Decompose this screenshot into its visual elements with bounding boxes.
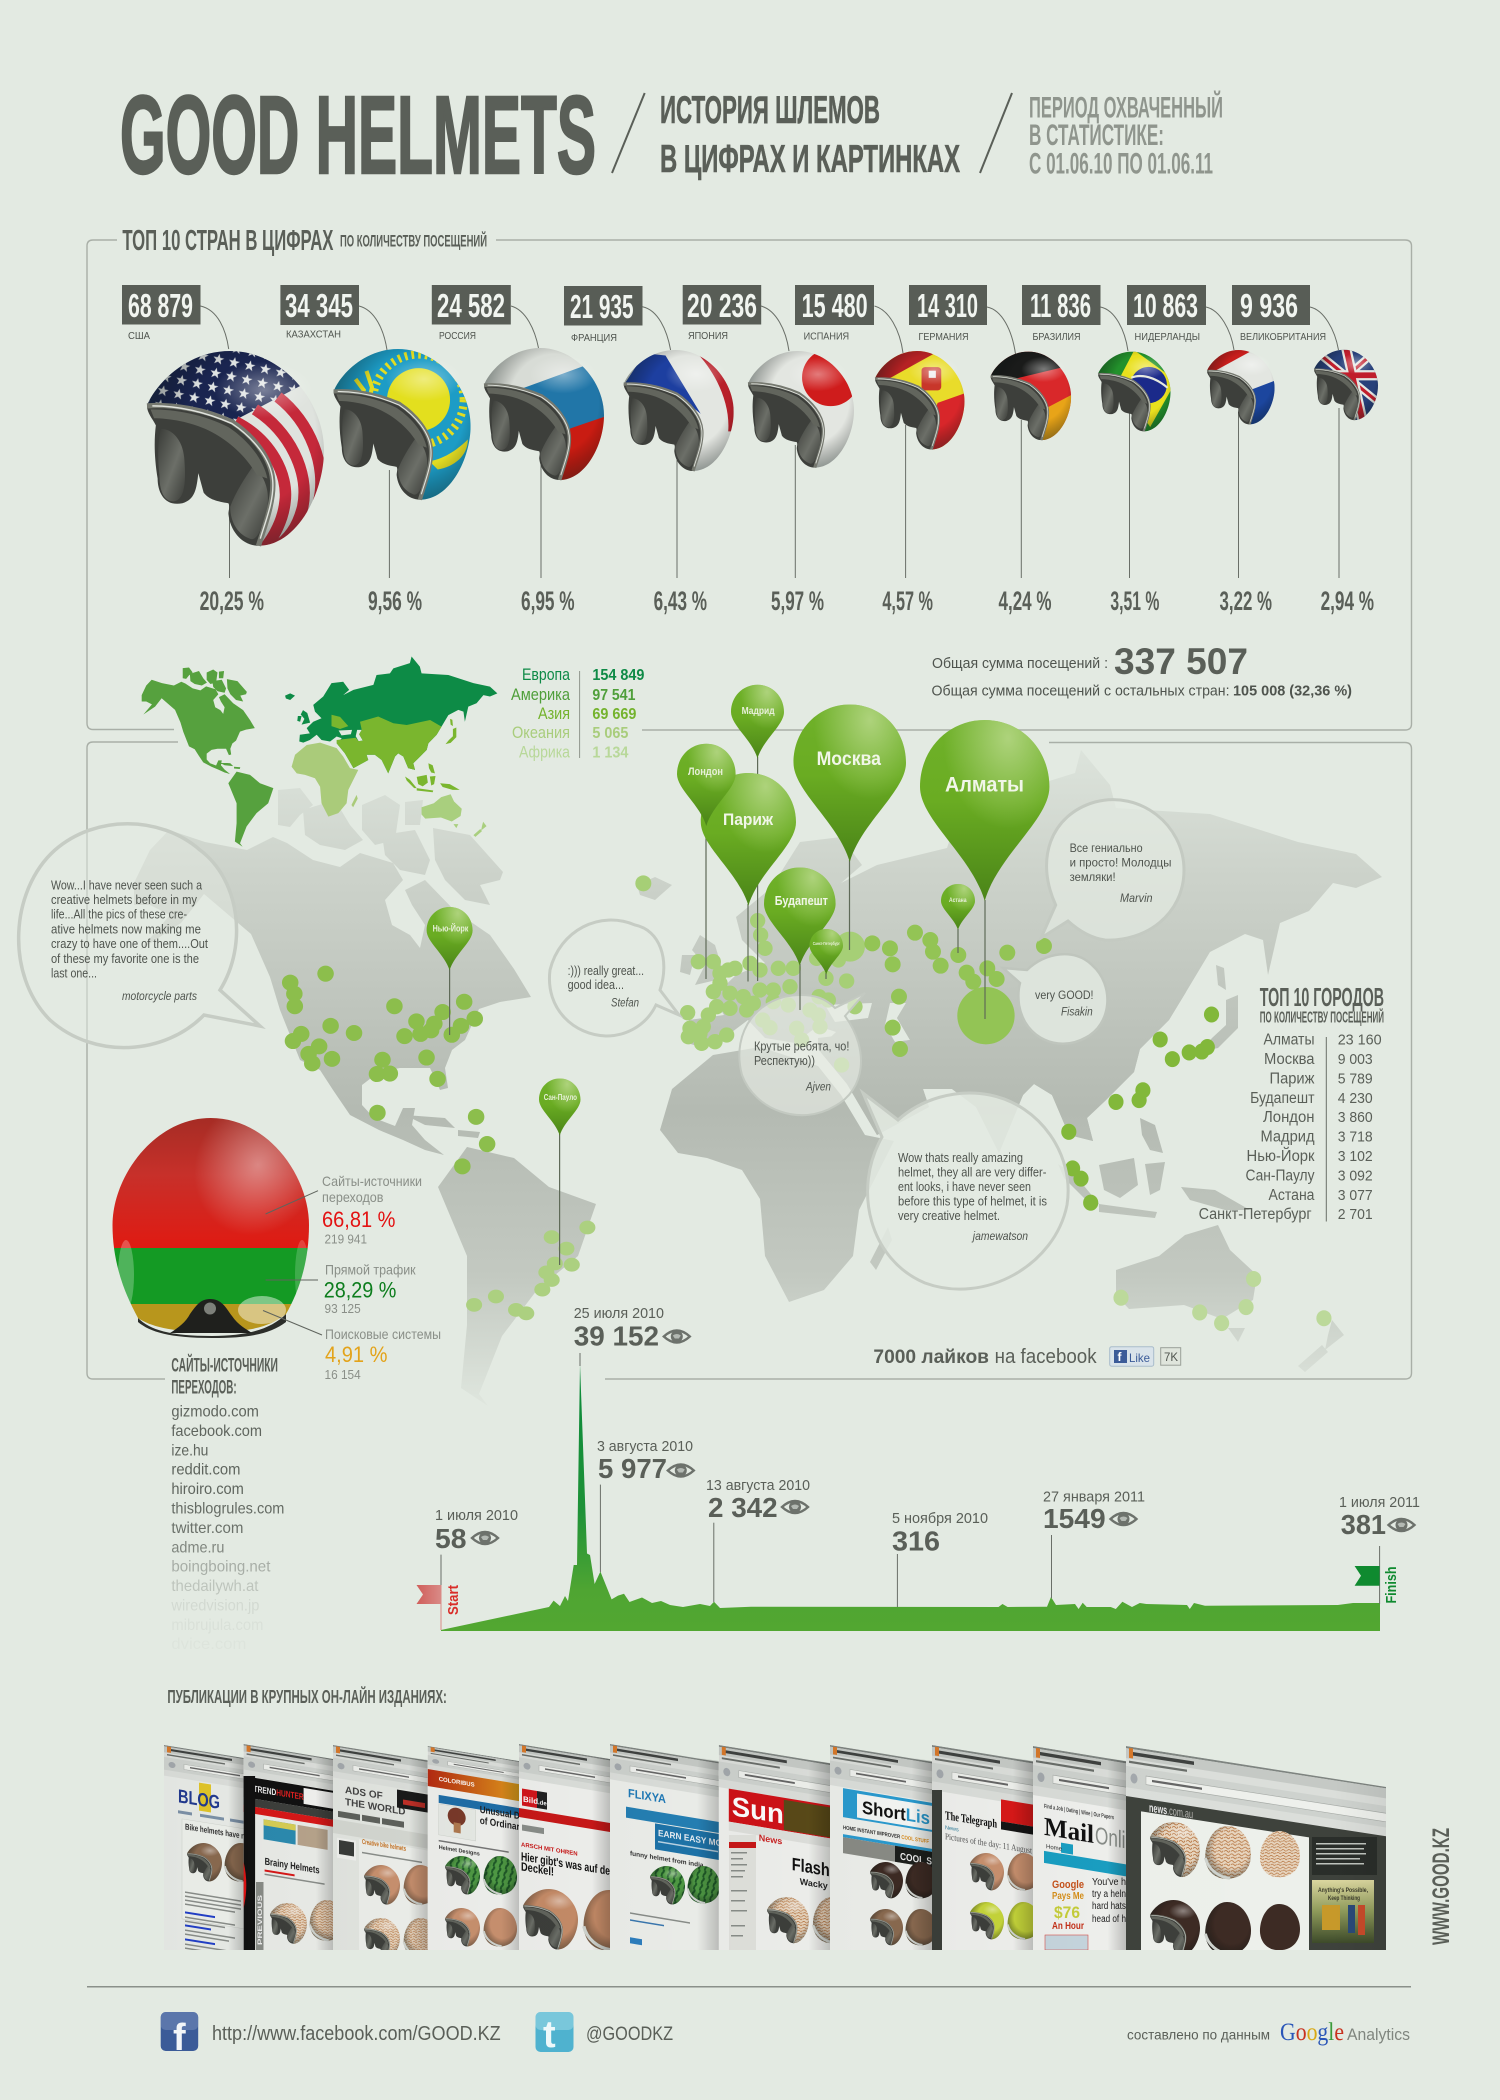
referral sites list: ПЕРЕХОДОВ:: [171, 1378, 237, 1398]
screenshot: The Sun: News: [759, 1833, 782, 1846]
finish flag: [1355, 1566, 1400, 1604]
speech bubble: Fisakin: very GOOD!: [1035, 988, 1094, 1002]
vertical site name: WWW.GOOD.KZ: [1428, 1828, 1455, 1945]
country percentages: 9,56 %: [368, 586, 422, 616]
traffic figures: search: 4,91 %: [325, 1342, 388, 1367]
top 10 cities: 5 789: [1338, 1070, 1373, 1087]
speech bubble: Stefan: good idea...: [568, 978, 624, 992]
country percentages: 4,57 %: [882, 586, 933, 616]
speech bubble: jamewatson: Wow thats really amazing: [898, 1151, 1023, 1165]
country percentages: 3,51 %: [1110, 586, 1159, 616]
balloon: Moscow: [794, 704, 906, 862]
continent legend: Африка: [519, 744, 571, 762]
slash divider: [612, 93, 645, 173]
screenshot: Colourlovers banner site: Helmet Designs: [439, 1845, 480, 1858]
facebook likes: f: [1118, 1350, 1122, 1364]
top 10 cities: 2 701: [1338, 1206, 1373, 1223]
referral sites list: gizmodo.com: [171, 1404, 259, 1420]
country percentages: 6,43 %: [654, 586, 707, 616]
balloon: Almaty: Алматы: [945, 774, 1024, 796]
top 10 cities: Будапешт: [1250, 1090, 1314, 1107]
speech bubble: Marvin: Marvin: [1120, 891, 1153, 905]
period caption: В СТАТИСТИКЕ:: [1029, 119, 1164, 152]
screenshot: The Sun: Flash: [792, 1854, 830, 1880]
speech bubble: Marvin: [1041, 800, 1184, 940]
chart label: 1 July 2011: 1 июля 2011: [1339, 1494, 1420, 1511]
traffic figures: direct: [324, 1262, 416, 1316]
speech bubble: Ajven: Крутые ребята, чо!: [754, 1040, 849, 1054]
top 10 cities: Сан-Паулу: [1246, 1167, 1315, 1184]
speech bubble: jamewatson: jamewatson: [971, 1229, 1028, 1243]
helmet: Kazakhstan: [331, 346, 473, 502]
speech bubble: jamewatson: helmet, they all are very differ-: [898, 1166, 1046, 1180]
balloon: Saint Petersburg: [810, 929, 843, 975]
traffic figures: search: Поисковые системы: [325, 1326, 441, 1342]
balloon: London: Лондон: [688, 766, 723, 778]
icon: twitter: [536, 2012, 574, 2056]
screenshot: Mail Online: Home: [1046, 1844, 1063, 1853]
helmet: Russia: [482, 346, 609, 482]
country count boxes: 9 936: [1240, 287, 1298, 324]
chart label: 3 August 2010: 5 977: [598, 1453, 667, 1484]
chart label: 27 January 2011: [1043, 1489, 1145, 1534]
balloon: London: [677, 744, 736, 826]
referral sites list: mibrujula.com: [171, 1617, 263, 1634]
screenshot: Bild: Hier gibt's was auf de: [521, 1849, 610, 1878]
country names: США: [128, 330, 150, 342]
country percentages: 3,22 %: [1220, 586, 1272, 616]
balloon: Sao Paulo: [539, 1078, 580, 1136]
city dots: South America: [466, 1221, 595, 1320]
screenshot: The Telegraph: [932, 1745, 1033, 1950]
country names: ИСПАНИЯ: [804, 330, 849, 342]
facebook url: http://www.facebook.com/GOOD.KZ: [212, 2023, 501, 2045]
screenshot: Flixya: FLIXYA: [628, 1786, 666, 1806]
title block: [120, 74, 1223, 197]
referral sites list: facebook.com: [171, 1423, 262, 1440]
screenshot: Mail Online: Onlin: [1095, 1822, 1135, 1856]
facebook likes: Like: [1129, 1351, 1150, 1365]
helmet: Netherlands: [1206, 349, 1277, 426]
speech bubble: Stefan: :))) really great...: [568, 964, 644, 978]
facebook likes: [873, 1346, 1181, 1368]
traffic figures: referrals: [322, 1173, 422, 1246]
period caption: С 01.06.10 ПО 01.06.11: [1029, 148, 1213, 180]
traffic figures: direct: Прямой трафик: [325, 1262, 416, 1278]
balloon: Moscow: Москва: [817, 749, 881, 770]
country percentages: 5,97 %: [771, 586, 824, 616]
speech bubble: Fisakin: [1003, 954, 1107, 1044]
chart label: 13 August 2010: 13 августа 2010: [706, 1477, 810, 1494]
screenshot: Blog: [164, 1745, 244, 1950]
screenshot: The Telegraph: News: [945, 1825, 959, 1833]
screenshot: Mail Online: You've h: [1092, 1877, 1126, 1888]
chart label: 13 August 2010: 2 342: [708, 1492, 778, 1523]
city dots: Asia: [864, 925, 1052, 1057]
speech bubble: motorcycle parts: last one...: [51, 967, 97, 981]
speech bubble: motorcycle parts: of these my favorite one is the: [51, 952, 199, 966]
referral sites list: wiredvision.jp: [170, 1598, 259, 1614]
balloon: Sao Paulo: Сан-Пауло: [544, 1093, 577, 1102]
facebook likes: на facebook: [995, 1346, 1098, 1368]
country names: НИДЕРЛАНДЫ: [1134, 331, 1200, 343]
referral sites list: dvice.com: [171, 1636, 246, 1653]
helmet: UK: [1314, 350, 1378, 420]
chart label: 25 July 2010: [574, 1305, 690, 1351]
subtitle line two: В ЦИФРАХ И КАРТИНКАХ: [660, 138, 960, 181]
referral sites list: reddit.com: [171, 1462, 240, 1479]
country count boxes: 10 863: [1133, 287, 1198, 324]
referral sites list: thisblogrules.com: [171, 1500, 284, 1518]
chart label: 1 July 2010: 58: [435, 1523, 466, 1554]
traffic figures: referrals: 219 941: [324, 1232, 367, 1246]
top 10 cities: Алматы: [1264, 1032, 1314, 1048]
speech bubble: jamewatson: before this type of helmet, it is: [898, 1194, 1047, 1208]
chart label: 27 January 2011: 27 января 2011: [1043, 1489, 1145, 1506]
continent legend: [511, 666, 644, 762]
helmet: Germany: [989, 350, 1074, 442]
screenshot: The Sun: Wacky: [800, 1876, 828, 1891]
data source: составлено по данным: [1127, 2026, 1270, 2042]
screenshot: Colourlovers banner site: [428, 1746, 519, 1950]
heading: top 10 countries: ТОП 10 СТРАН В ЦИФРАХ: [122, 225, 334, 257]
speech bubble: jamewatson: ent looks, i have never seen: [898, 1180, 1031, 1194]
country count boxes: [122, 285, 1310, 326]
top 10 cities: Нью-Йорк: [1246, 1147, 1315, 1165]
screenshot: ShortList: ShortLis: [862, 1797, 930, 1828]
country count boxes: 24 582: [437, 287, 505, 324]
country percentages: 6,95 %: [521, 586, 575, 616]
referral sites list: hiroiro.com: [171, 1481, 244, 1498]
referral sites list: САЙТЫ-ИСТОЧНИКИ: [171, 1355, 278, 1377]
screenshot: Mail Online: Pays Me: [1052, 1891, 1084, 1902]
speech bubble: Marvin: Все гениально: [1070, 841, 1143, 855]
top 10 cities: Санкт-Петербург: [1199, 1206, 1312, 1223]
chart label: 5 November 2010: 316: [892, 1526, 940, 1557]
top 10 cities: 3 077: [1338, 1187, 1373, 1204]
country names: ГЕРМАНИЯ: [918, 331, 968, 343]
country count boxes: 20 236: [687, 287, 757, 324]
top 10 cities: ТОП 10 ГОРОДОВ: [1260, 982, 1384, 1012]
screenshot: Colourlovers banner site: Unusual D: [480, 1805, 520, 1822]
traffic figures: referrals: 66,81 %: [322, 1207, 396, 1232]
icon: facebook: f: [173, 2017, 186, 2059]
screenshot: Trend Hunter: [244, 1744, 333, 1950]
helmet: France: [622, 348, 738, 473]
balloon: New York: [427, 907, 473, 970]
referral sites list: boingboing.net: [171, 1559, 271, 1576]
main title: GOOD HELMETS: [120, 74, 596, 197]
speech bubble: motorcycle parts: motorcycle parts: [122, 989, 197, 1003]
screenshot: Ads of the World: Creative bike helmets: [362, 1839, 406, 1853]
helmet: USA: [143, 347, 328, 549]
continent map (coloured): [142, 656, 497, 847]
speech bubble: jamewatson: very creative helmet.: [898, 1209, 1000, 1223]
data source: Google: [1280, 2019, 1344, 2046]
balloon: Saint Petersburg: Санкт-Петербург: [813, 940, 840, 946]
continent legend: Европа: [522, 666, 571, 684]
speech bubble: motorcycle parts: Wow...I have never seen such a: [51, 878, 202, 892]
country count boxes: 15 480: [802, 287, 868, 324]
top 10 cities: 4 230: [1338, 1090, 1373, 1107]
top 10 cities: 3 092: [1338, 1167, 1373, 1184]
screenshot: Flixya: EARN EASY MO: [658, 1828, 722, 1848]
continent legend: Азия: [538, 705, 570, 723]
speech bubble: Ajven: [739, 993, 865, 1115]
balloon: Madrid: Мадрид: [742, 705, 775, 717]
continent legend: 69 669: [592, 706, 636, 723]
continent legend: 154 849: [592, 667, 644, 684]
speech bubble: Marvin: и просто! Молодцы: [1070, 856, 1171, 870]
chart label: 13 August 2010: [706, 1477, 810, 1523]
top 10 cities: Мадрид: [1260, 1129, 1314, 1146]
speech bubble: motorcycle parts: crazy to have one of them....Out: [51, 937, 208, 951]
top 10 cities: Лондон: [1263, 1109, 1314, 1126]
screenshot: Mail Online: hard hats: [1092, 1901, 1126, 1912]
screenshot: The Telegraph: Pictures of the day: 11 August: [945, 1831, 1032, 1856]
top 10 cities: 3 860: [1338, 1109, 1373, 1126]
screenshot: Mail Online: Mail: [1044, 1812, 1094, 1849]
referral sites list: thedailywh.at: [171, 1578, 259, 1595]
data source: Analytics: [1347, 2025, 1410, 2044]
continent legend: Океания: [512, 724, 570, 742]
chart label: 3 August 2010: 3 августа 2010: [597, 1438, 693, 1455]
top 10 cities: [1199, 982, 1384, 1223]
balloon: Almaty: [920, 720, 1049, 901]
speech bubble: Fisakin: Fisakin: [1061, 1004, 1093, 1018]
screenshot: Blog: BLOG: [178, 1786, 220, 1814]
screenshot: Mail Online: Google: [1052, 1879, 1084, 1891]
icon: facebook: [161, 2012, 198, 2059]
start flag: Start: [445, 1585, 462, 1615]
screenshot: Mail Online: try a heln: [1092, 1889, 1126, 1900]
city dots: East Asia and Oceania: [1061, 1006, 1332, 1331]
country percentages: 2,94 %: [1321, 586, 1374, 616]
speech bubble: Stefan: Stefan: [611, 996, 639, 1010]
continent legend: Америка: [511, 686, 571, 704]
chart label: 5 November 2010: [892, 1510, 988, 1557]
helmet snap: [170, 1299, 252, 1333]
screenshot: Mail Online: Find a Job | Dating | Wine | Our Papers: [1044, 1804, 1114, 1821]
country names: ВЕЛИКОБРИТАНИЯ: [1240, 331, 1326, 343]
screenshot: Trend Hunter: Brainy Helmets: [265, 1857, 320, 1877]
facebook likes: 7000 лайков: [873, 1347, 989, 1368]
footer rule: [87, 1986, 1411, 1988]
data source: [1127, 2019, 1410, 2046]
screenshot: Bild: ARSCH MIT OHREN: [521, 1842, 578, 1858]
speech bubble: jamewatson: [863, 1093, 1068, 1289]
facebook likes: 7K: [1164, 1350, 1178, 1364]
speech bubble: motorcycle parts: ative helmets now making me: [51, 922, 201, 936]
balloon: Budapest: [764, 868, 836, 966]
country percentages: 20,25 %: [200, 586, 264, 616]
chart label: 25 July 2010: 39 152: [574, 1320, 659, 1351]
chart label: 1 July 2010: 1 июля 2010: [435, 1507, 518, 1524]
helmet: Brazil: [1098, 352, 1170, 432]
country count boxes: 68 879: [128, 287, 193, 324]
country count boxes: 14 310: [917, 287, 978, 324]
screenshot: Bild: [519, 1744, 610, 1950]
screenshot: Mail Online: head of h: [1092, 1914, 1126, 1925]
traffic figures: direct: 28,29 %: [324, 1278, 396, 1302]
continent legend: 1 134: [592, 744, 628, 762]
totals: 105 008 (32,36 %): [1233, 682, 1352, 700]
country names: ЯПОНИЯ: [688, 330, 728, 342]
totals: [932, 641, 1352, 700]
top 10 cities: 3 102: [1338, 1148, 1373, 1165]
traffic figures: search: 16 154: [324, 1367, 361, 1382]
country percentages: [200, 586, 1374, 616]
screenshot: Mail Online: [1033, 1746, 1126, 1950]
slash divider: [980, 93, 1012, 173]
chart label: 5 November 2010: 5 ноября 2010: [892, 1510, 988, 1527]
balloon: New York: Нью-Йорк: [433, 923, 469, 934]
screenshot: Bild: .de: [538, 1800, 547, 1808]
city dots: Americas: [282, 966, 495, 1174]
period caption: ПЕРИОД ОХВАЧЕННЫЙ: [1029, 90, 1223, 124]
referral sites list: adme.ru: [171, 1539, 224, 1556]
top 10 cities: Париж: [1270, 1070, 1315, 1087]
traffic area chart: [441, 1364, 1380, 1631]
country names: ФРАНЦИЯ: [571, 332, 617, 344]
speech bubble: Ajven: Респектую)): [754, 1054, 815, 1068]
city dots: Europe: [635, 875, 865, 1073]
balloon: Madrid: [731, 685, 784, 758]
top 10 cities: 3 718: [1338, 1129, 1373, 1146]
screenshot: news.com.au: [1126, 1746, 1386, 1950]
world map (grey): [134, 750, 1382, 1406]
twitter handle: @GOODKZ: [586, 2024, 673, 2045]
totals: Общая сумма посещений :: [932, 655, 1108, 672]
screenshot: The Telegraph: The Telegraph: [945, 1808, 997, 1831]
subtitle line one: ИСТОРИЯ ШЛЕМОВ: [660, 89, 880, 132]
chart label: 25 July 2010: 25 июля 2010: [574, 1305, 664, 1322]
screenshot: Blog: Bike helmets have n: [185, 1821, 245, 1841]
heading: top 10 countries: ПО КОЛИЧЕСТВУ ПОСЕЩЕНИЙ: [340, 232, 487, 250]
helmet: Japan: [746, 349, 859, 470]
balloon: Paris: [701, 773, 796, 906]
country percentages: 4,24 %: [998, 586, 1052, 616]
speech bubble: motorcycle parts: creative helmets before in my: [51, 893, 198, 907]
chart label: 1 July 2010: [435, 1507, 518, 1554]
balloon: Paris: Париж: [723, 810, 774, 829]
country count boxes: 34 345: [285, 287, 353, 324]
screenshot: Mail Online: $76: [1054, 1903, 1080, 1922]
screenshot: The Sun: [718, 1745, 830, 1950]
screenshot: Trend Hunter: TRENDHUNTER: [254, 1784, 304, 1802]
screenshot: Flixya: funny helmet from india: [630, 1850, 704, 1869]
traffic figures: direct: 93 125: [324, 1301, 361, 1316]
continent legend: 97 541: [592, 687, 635, 704]
callout leaders: [263, 1191, 322, 1335]
screenshot: ShortList: HOME INSTANT IMPROVER COOL STUFF: [843, 1825, 929, 1845]
balloon: Astana: Астана: [949, 898, 967, 904]
speech bubble: Stefan: [549, 920, 679, 1036]
period caption: [1029, 90, 1223, 180]
screenshot: Trend Hunter: PREVIOUS: [258, 1895, 264, 1945]
chart label: 1 July 2011: [1339, 1494, 1420, 1540]
speech bubble: Marvin: земляки!: [1070, 870, 1116, 884]
screenshot: news.com.au: Anything's Possible,: [1318, 1887, 1368, 1894]
screenshot: Ads of the World: ADS OF: [345, 1785, 383, 1802]
balloon: Budapest: Будапешт: [775, 893, 828, 908]
screenshot: Ads of the World: THE WORLD: [345, 1797, 405, 1818]
screenshot: Flixya: [610, 1744, 719, 1950]
speech bubble: motorcycle parts: life...All the pics of these cre-: [51, 908, 187, 922]
totals: Общая сумма посещений с остальных стран:: [932, 682, 1230, 700]
screenshot: news.com.au: news.com.au: [1149, 1801, 1193, 1821]
screenshot: Mail Online: An Hour: [1052, 1921, 1084, 1932]
speech bubble: motorcycle parts: [19, 824, 260, 1048]
country names: [128, 328, 1326, 344]
balloon: Astana: [941, 884, 975, 930]
panel borders: [87, 240, 1412, 1379]
top 10 cities: Астана: [1268, 1187, 1315, 1204]
country names: БРАЗИЛИЯ: [1032, 331, 1080, 343]
traffic figures: referrals: Сайты-источники: [322, 1173, 422, 1189]
chart label: 1 July 2011: 381: [1341, 1509, 1386, 1540]
helmet: Spain: [873, 349, 968, 451]
referral sites list: ize.hu: [171, 1442, 208, 1459]
screenshot: Bild: Deckel!: [521, 1859, 554, 1879]
referral sites list: twitter.com: [171, 1520, 243, 1537]
totals: 337 507: [1114, 641, 1248, 682]
helmet back: [112, 1118, 309, 1338]
speech bubble: Ajven: Ajven: [805, 1080, 831, 1094]
screenshot: Colourlovers banner site: COLORIBUS: [439, 1777, 475, 1789]
screenshot: The Sun: Sun: [732, 1790, 784, 1830]
screenshot: Ads of the World: [333, 1745, 428, 1950]
screenshot: Bild: Bild: [523, 1795, 538, 1806]
top 10 cities: 9 003: [1338, 1051, 1373, 1068]
traffic figures: referrals: переходов: [322, 1189, 384, 1205]
chart label: 27 January 2011: 1549: [1043, 1503, 1106, 1534]
continent legend: 5 065: [592, 725, 628, 742]
screenshot: ShortList: COOL S: [900, 1852, 932, 1868]
start flag: [416, 1585, 462, 1630]
screenshot: news.com.au: Galleries: GOOD Helmets: [1262, 1834, 1308, 1848]
icon: twitter: t: [543, 2014, 556, 2056]
chart label: 3 August 2010: [597, 1438, 694, 1484]
chart leaders: [441, 1353, 1380, 1607]
balloon strings: [450, 757, 985, 1265]
top 10 cities: 23 160: [1338, 1032, 1382, 1048]
finish flag: Finish: [1383, 1566, 1400, 1604]
traffic figures: search: [324, 1326, 441, 1382]
screenshot: ShortList: [830, 1745, 932, 1950]
country names: РОССИЯ: [439, 330, 476, 342]
referral sites list: [170, 1355, 284, 1653]
screenshot: Colourlovers banner site: of Ordinar: [480, 1816, 520, 1833]
top 10 cities: Москва: [1264, 1051, 1315, 1068]
leader lines for countries: [200, 306, 1339, 578]
screenshot: news.com.au: Keep Thinking: [1328, 1895, 1360, 1902]
publications heading: ПУБЛИКАЦИИ В КРУПНЫХ ОН-ЛАЙН ИЗДАНИЯХ:: [167, 1686, 447, 1707]
country count boxes: 11 836: [1030, 287, 1091, 324]
country names: КАЗАХСТАН: [286, 328, 341, 340]
country count boxes: 21 935: [570, 288, 634, 325]
traffic helmet: [112, 1118, 322, 1338]
